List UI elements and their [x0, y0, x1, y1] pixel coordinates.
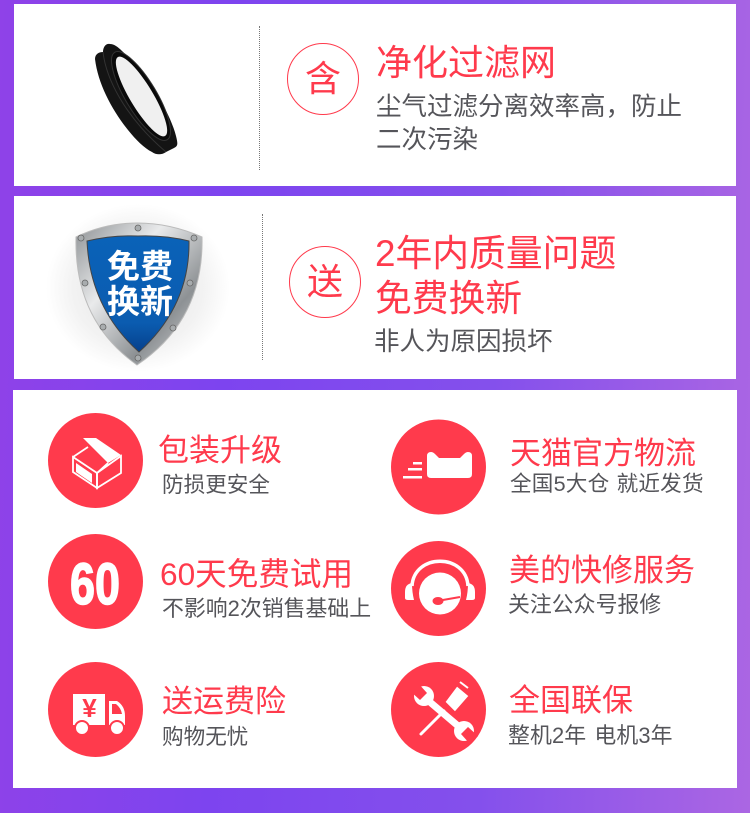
heading: 净化过滤网 [376, 42, 556, 83]
icon: 60 [48, 534, 143, 629]
text: warranty: 整机2年 电机3年 [508, 723, 673, 748]
heading: shipping: 送运费险 [162, 684, 286, 719]
icon: shield: 换新 [107, 283, 173, 320]
icon: truck: ¥ [82, 693, 97, 723]
description: 尘气过滤分离效率高，防止 [376, 93, 682, 121]
panel: services [13, 390, 737, 788]
text: trial: 不影响2次销售基础上 [162, 596, 371, 621]
badge: 送: 送 [307, 261, 343, 302]
icon: filter ring [95, 44, 178, 154]
description: 二次污染 [376, 126, 478, 154]
heading: repair: 美的快修服务 [509, 553, 695, 588]
heading [375, 233, 616, 319]
badge: 含: 含 [305, 58, 341, 99]
text: shipping: 购物无忧 [162, 724, 248, 749]
icon: shield: 免费 [107, 248, 173, 285]
heading: trial: 60天免费试用 [160, 556, 353, 592]
text: repair: 关注公众号报修 [508, 592, 661, 617]
icon: truck [48, 662, 143, 757]
icon: tools [391, 662, 486, 757]
heading: 免费换新 [375, 278, 522, 319]
heading: 2年内质量问题 [375, 233, 616, 274]
icon: tmall logistics [391, 420, 486, 514]
heading: logistics: 天猫官方物流 [510, 436, 696, 471]
icon: shield [63, 220, 212, 366]
heading: warranty: 全国联保 [509, 683, 633, 718]
badge: 送 [289, 246, 361, 318]
description: 非人为原因损坏 [374, 328, 553, 356]
divider [259, 26, 260, 170]
badge: 含 [287, 43, 359, 115]
text: packaging: 防损更安全 [162, 472, 270, 497]
panel: filter [14, 4, 736, 186]
heading: packaging: 包装升级 [158, 433, 282, 468]
icon: box [48, 413, 143, 508]
panel: warranty [14, 196, 736, 379]
description [376, 93, 682, 154]
divider [262, 214, 263, 360]
text: logistics: 全国5大仓 就近发货 [510, 471, 704, 496]
icon: 60: 60 [70, 552, 120, 617]
icon: headset [391, 541, 486, 636]
